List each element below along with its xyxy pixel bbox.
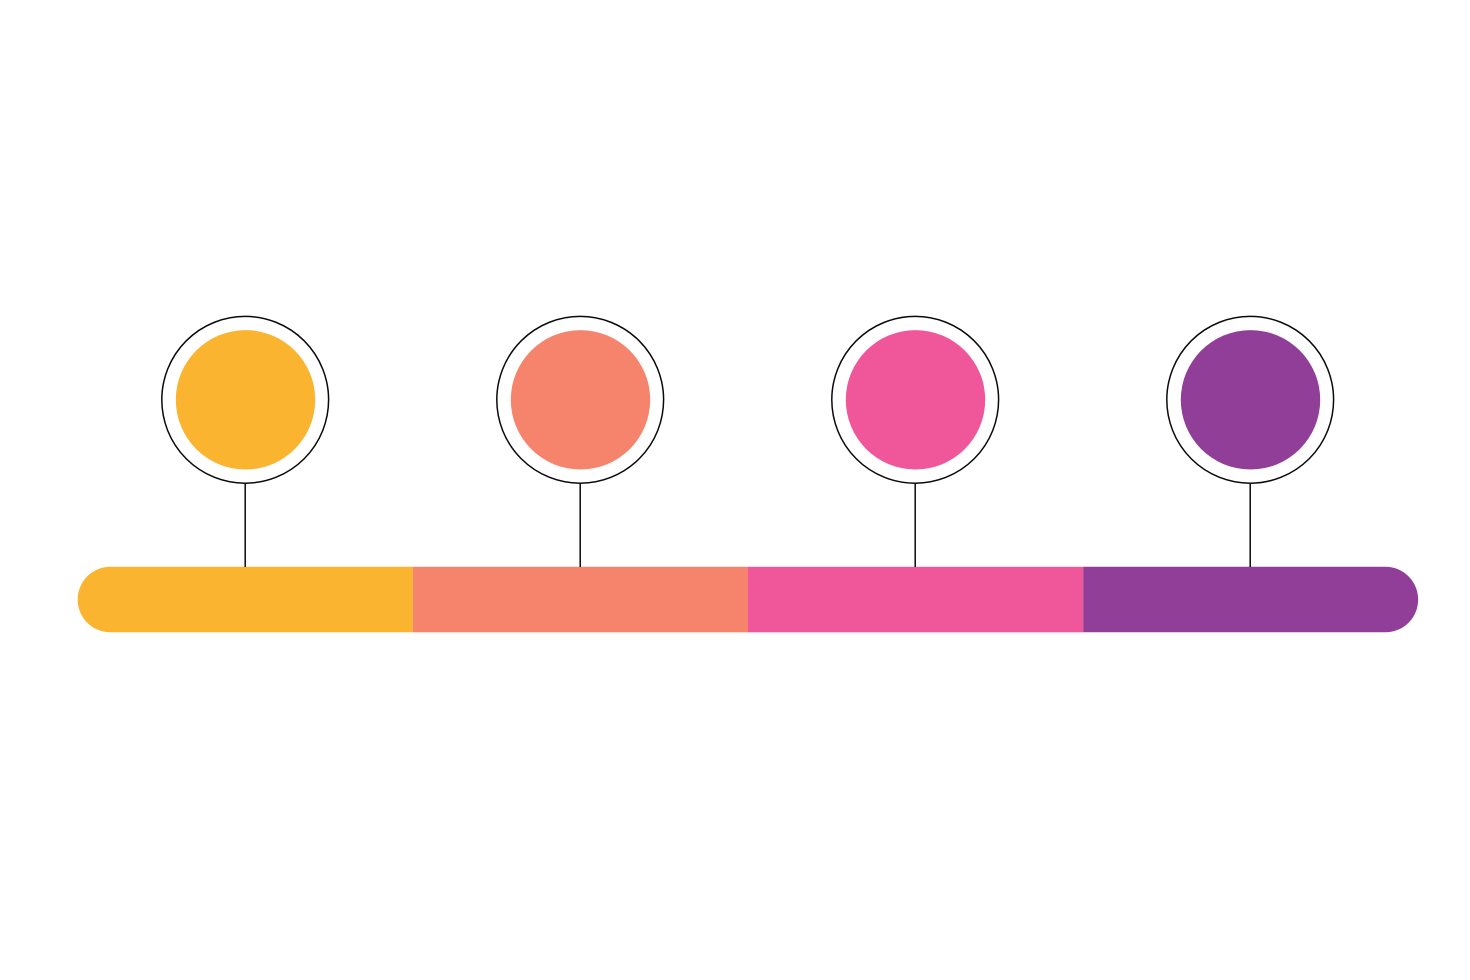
inner circle 1: [176, 330, 315, 469]
connector line 4: [1249, 483, 1251, 567]
inner circle 4: [1181, 330, 1320, 469]
inner circle 2: [511, 330, 650, 469]
bar segment 1: yellow: [78, 567, 413, 632]
outer ring 3: [832, 316, 999, 483]
outer ring 4: [1167, 316, 1334, 483]
marker 3: pink: [832, 316, 999, 567]
connector line 2: [579, 483, 581, 567]
connector line 3: [914, 483, 916, 567]
inner circle 3: [846, 330, 985, 469]
bar segment 4: purple: [1083, 567, 1418, 632]
marker 2: coral: [497, 316, 664, 567]
connector line 1: [244, 483, 246, 567]
bar segment 2: coral: [413, 567, 748, 632]
marker 1: yellow: [162, 316, 329, 567]
bar segment 3: pink: [748, 567, 1083, 632]
outer ring 2: [497, 316, 664, 483]
marker 4: purple: [1167, 316, 1334, 567]
timeline bar: [78, 567, 1418, 632]
outer ring 1: [162, 316, 329, 483]
